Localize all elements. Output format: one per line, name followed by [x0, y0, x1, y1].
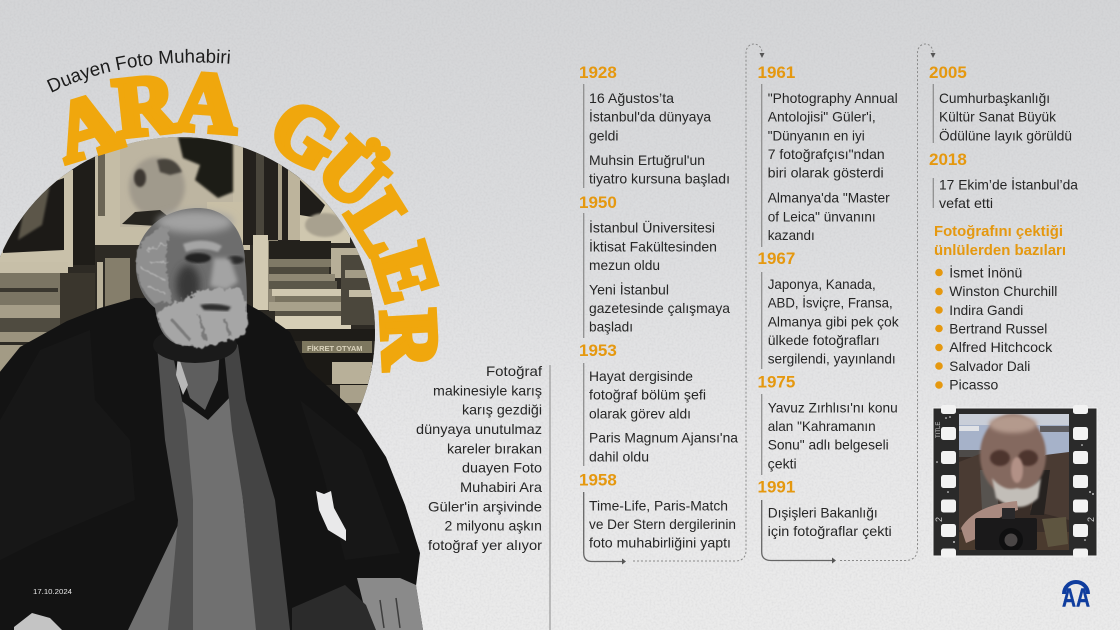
1928: 1928 — [579, 63, 617, 82]
1958 — [579, 470, 736, 551]
list of famous people: Bertrand Russel — [949, 320, 1047, 336]
1928: İstanbul'da dünyaya — [589, 108, 711, 125]
trousers — [292, 585, 376, 630]
1961: "Photography Annual — [768, 90, 898, 106]
1991 — [758, 478, 892, 539]
list of famous people: Indira Gandi — [949, 302, 1023, 318]
title: ARA GÜLER on an arc — [44, 54, 455, 371]
1953 — [579, 341, 738, 464]
1953: dahil oldu — [589, 448, 649, 464]
1991: için fotoğraflar çekti — [768, 523, 892, 539]
1958: foto muhabirliğini yaptı — [589, 535, 731, 551]
1975: 1975 — [758, 373, 795, 392]
list of famous people: İsmet İnönü — [949, 264, 1022, 280]
dark columns right of the portrait — [243, 140, 300, 245]
intro paragraph: Fotoğraf — [486, 363, 542, 379]
2018 — [929, 150, 1078, 211]
intro paragraph: dünyaya unutulmaz — [416, 421, 542, 437]
1975: çekti — [768, 455, 797, 471]
1950: gazetesinde çalışmaya — [589, 300, 730, 316]
1961: kazandı — [768, 227, 815, 243]
2005 — [929, 63, 1072, 143]
1991: 1991 — [758, 478, 795, 497]
date: 17.10.2024 — [33, 587, 72, 596]
film strip photo: 2 — [934, 517, 944, 522]
1967: 1967 — [758, 249, 795, 268]
intro paragraph: duayen Foto — [462, 460, 542, 476]
timeline column 1 — [579, 44, 764, 564]
1953: Paris Magnum Ajansı'na — [589, 430, 738, 446]
list of famous people: Salvador Dali — [949, 358, 1030, 374]
title: ARA GÜLER on an arc: E — [355, 235, 455, 311]
gap between arm and body — [316, 491, 346, 541]
1961: "Dünyanın en iyi — [768, 127, 865, 143]
intro paragraph: fotoğraf yer alıyor — [428, 537, 542, 553]
1928: geldi — [589, 127, 618, 143]
1928: Muhsin Ertuğrul'un — [589, 152, 705, 168]
title: ARA GÜLER on an arc: A — [173, 54, 241, 152]
1967: ülkede fotoğrafları — [768, 332, 880, 348]
1958: Time-Life, Paris-Match — [589, 497, 728, 513]
right framed picture — [300, 178, 350, 243]
1991: Dışişleri Bakanlığı — [768, 504, 878, 520]
1958: 1958 — [579, 470, 617, 490]
1953: olarak görev aldı — [589, 405, 691, 421]
1967: ABD, İsviçre, Fransa, — [768, 294, 893, 311]
1961: biri olarak gösterdi — [768, 165, 884, 181]
1953: fotoğraf bölüm şefi — [589, 387, 706, 403]
1975: Yavuz Zırhlısı'nı konu — [768, 399, 898, 415]
title: ARA GÜLER on an arc: L — [330, 177, 432, 269]
1950: mezun oldu — [589, 257, 660, 273]
title: ARA GÜLER on an arc: Ü — [301, 122, 403, 226]
film strip photo: TITLE — [936, 422, 942, 438]
dark wall strip beside left frame — [73, 160, 95, 265]
heading: famous people photographed — [934, 223, 1066, 259]
centre framed portrait — [95, 133, 250, 250]
list of famous people — [935, 264, 1057, 393]
1961: Almanya'da "Master — [768, 190, 890, 206]
2018: 2018 — [929, 150, 967, 169]
1961: Antolojisi" Güler'i, — [768, 109, 876, 125]
beard — [157, 288, 247, 346]
1953: 1953 — [579, 341, 617, 360]
neck shadow — [153, 327, 237, 363]
title: ARA GÜLER on an arc: A — [44, 73, 130, 181]
list of famous people: Picasso — [949, 377, 999, 393]
1928: 16 Ağustos’ta — [589, 90, 674, 106]
1950: İktisat Fakültesinden — [589, 237, 717, 254]
1967: Japonya, Kanada, — [768, 276, 876, 292]
1961: 7 fotoğrafçısı"ndan — [768, 146, 885, 162]
1953: Hayat dergisinde — [589, 368, 693, 384]
1928 — [579, 63, 730, 187]
intro paragraph: Muhabiri Ara — [460, 479, 542, 495]
2005: Kültür Sanat Büyük — [939, 109, 1057, 125]
portrait of Ara Güler — [0, 208, 423, 630]
coat — [0, 298, 423, 630]
sweater — [128, 395, 257, 630]
intro paragraph: kareler bırakan — [447, 440, 542, 456]
2005: Ödülüne layık görüldü — [939, 126, 1072, 143]
scarf — [157, 345, 193, 630]
2018: 17 Ekim’de İstanbul’da — [939, 175, 1078, 192]
1975 — [758, 373, 898, 471]
left framed picture — [0, 170, 73, 267]
1928: tiyatro kursuna başladı — [589, 171, 730, 187]
title: ARA GÜLER on an arc: R — [364, 308, 455, 371]
2018: vefat etti — [939, 195, 993, 211]
left book stacks — [0, 258, 130, 372]
list of famous people: Alfred Hitchcock — [949, 339, 1053, 355]
right book stacks: FİKRET OTYAM — [307, 344, 363, 353]
film strip photo — [932, 405, 1098, 558]
1961: 1961 — [758, 63, 795, 82]
1961 — [758, 63, 898, 243]
intro paragraph: karış gezdiği — [462, 402, 542, 418]
2005: Cumhurbaşkanlığı — [939, 90, 1050, 106]
head — [136, 208, 247, 346]
1950: Yeni İstanbul — [589, 280, 669, 297]
intro paragraph: makinesiyle karış — [433, 382, 542, 398]
2005: 2005 — [929, 63, 967, 82]
1975: Sonu" adlı belgeseli — [768, 437, 889, 453]
intro paragraph — [416, 363, 542, 553]
left hand — [14, 613, 62, 630]
1961: of Leica" ünvanını — [768, 208, 876, 224]
shirt collar — [175, 345, 220, 410]
intro paragraph: Güler'in arşivinde — [428, 498, 542, 514]
film strip photo: 2 — [1086, 517, 1096, 522]
1950 — [579, 193, 730, 335]
1967: Almanya gibi pek çok — [768, 313, 900, 329]
1975: alan "Kahramanın — [768, 418, 876, 434]
title: ARA GÜLER on an arc: G — [255, 81, 355, 189]
heading: famous people photographed: Fotoğrafını çektiği — [934, 223, 1063, 240]
photo: bookshelf circle behind the portrait — [0, 137, 375, 414]
1967 — [758, 249, 900, 367]
1950: başladı — [589, 319, 633, 335]
eyes and face shadows — [183, 240, 222, 252]
1950: 1950 — [579, 193, 617, 212]
heading: famous people photographed: ünlülerden bazıları — [934, 242, 1066, 259]
icon: Anadolu Agency logo: AA — [1062, 582, 1090, 612]
right hand — [357, 578, 423, 630]
timeline column 2 — [758, 44, 936, 564]
intro paragraph: 2 milyonu aşkın — [444, 518, 542, 534]
title: ARA GÜLER on an arc: R — [110, 56, 182, 156]
right book stacks — [253, 235, 378, 403]
1967: sergilendi, yayınlandı — [768, 351, 896, 367]
list of famous people: Winston Churchill — [949, 283, 1057, 299]
1950: İstanbul Üniversitesi — [589, 219, 715, 236]
subtitle: Duayen Foto Muhabiri: Duayen Foto Muhabiri — [46, 48, 230, 92]
1958: ve Der Stern dergilerinin — [589, 516, 736, 532]
timeline column 3 — [929, 63, 1078, 211]
